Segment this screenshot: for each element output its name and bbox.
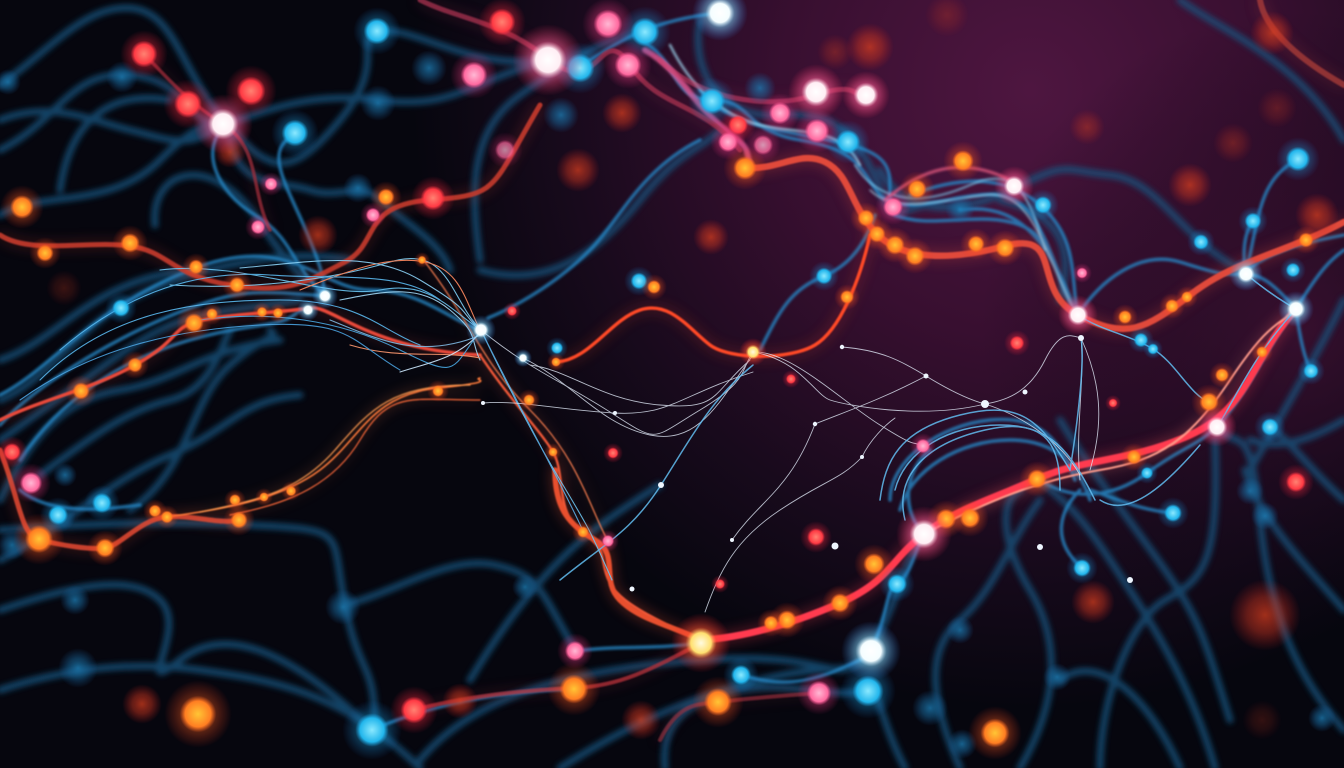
bright white hub nodes (193, 0, 1314, 681)
strand: lower main (701, 309, 1296, 640)
strand: top left (144, 54, 270, 230)
strand: left upper (0, 105, 540, 288)
strand: left middle (0, 308, 480, 420)
strand: upper right (745, 158, 1344, 329)
strand: lower left (0, 450, 240, 548)
strand: bottom (414, 643, 701, 710)
small white junction dots (481, 335, 1133, 592)
fine filaments: center white web (481, 330, 1099, 612)
strand: center wave (556, 235, 870, 362)
strand: center descending (480, 355, 701, 640)
fine filament bundle: left hub (20, 259, 612, 580)
strand: top (420, 0, 740, 150)
fine filaments: blue descending (560, 274, 1296, 580)
pink and blue top bundle (645, 45, 1075, 312)
